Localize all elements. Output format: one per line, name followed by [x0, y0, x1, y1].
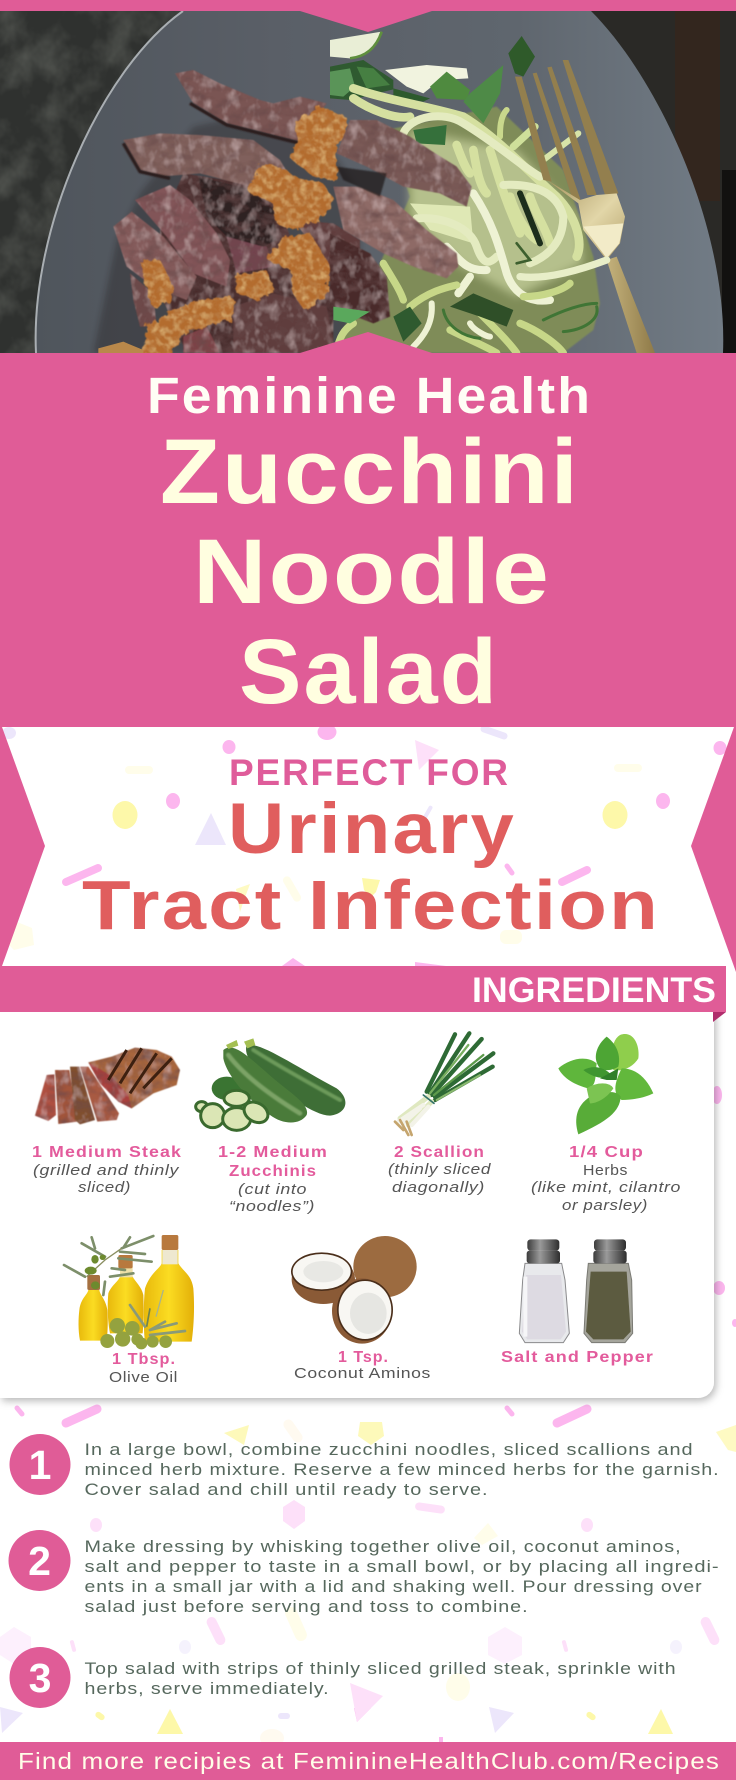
title: Noodle: Noodle — [193, 521, 551, 623]
label: 1 medium steak: 1 Medium Steak — [32, 1144, 182, 1161]
step 1 badge: 1 — [29, 1442, 51, 1488]
condition: tract infection: Tract Infection — [82, 866, 660, 944]
ingredient: salt and pepper shakers — [519, 1239, 633, 1343]
ingredient: steak — [35, 1048, 180, 1124]
footer bar — [0, 1742, 736, 1780]
mint and cut zucchini — [330, 32, 535, 123]
label: 2 scallion: (thinly sliced — [388, 1162, 492, 1178]
step 2 badge — [8, 1530, 70, 1591]
fork — [515, 60, 655, 353]
back noodles — [337, 88, 597, 353]
label: 1 tsp coconut aminos: 1 Tsp. — [338, 1349, 389, 1366]
decorative confetti background — [0, 724, 736, 1747]
top pink band with notch — [0, 0, 736, 32]
label: 1-2 medium zucchinis: “noodles”) — [229, 1199, 315, 1215]
step 2 text: Make dressing by whisking together olive oil, coconut aminos, — [84, 1537, 682, 1556]
label: 2 scallion — [388, 1144, 492, 1196]
step 3 — [10, 1647, 676, 1708]
label: 1 medium steak: sliced) — [78, 1180, 131, 1196]
label: 1/4 cup herbs: or parsley) — [562, 1198, 648, 1214]
ingredient: zucchini — [196, 1038, 345, 1130]
step 1 text: minced herb mixture. Reserve a few minced herbs for the garnish. — [84, 1460, 720, 1479]
ingredients heading band: INGREDIENTS — [472, 971, 716, 1010]
label: 1-2 medium zucchinis: 1-2 Medium — [218, 1144, 328, 1161]
step 1 badge — [10, 1434, 70, 1495]
label: 1-2 medium zucchinis: (cut into — [238, 1182, 307, 1198]
title: Zucchini: Zucchini — [160, 421, 580, 523]
label: 1 tsp coconut aminos — [294, 1349, 431, 1382]
label: 1-2 medium zucchinis: Zucchinis — [229, 1163, 317, 1180]
label: 1/4 cup herbs: Herbs — [583, 1163, 628, 1179]
label: 2 scallion: diagonally) — [392, 1180, 485, 1196]
label: 1/4 cup herbs: (like mint, cilantro — [531, 1180, 681, 1196]
ingredient: mint herbs — [558, 1034, 653, 1134]
label: 1 tbsp olive oil: 1 Tbsp. — [112, 1351, 176, 1368]
step 3 text: Top salad with strips of thinly sliced grilled steak, sprinkle with — [84, 1659, 676, 1678]
label: 1 tsp coconut aminos: Coconut Aminos — [294, 1366, 431, 1382]
step 1 — [10, 1434, 720, 1499]
ribbon panel: perfect for urinary tract infection — [0, 727, 736, 972]
ingredients heading band — [0, 966, 726, 1022]
step 1 text: In a large bowl, combine zucchini noodles, sliced scallions and — [84, 1440, 694, 1459]
ingredients card — [0, 966, 726, 1398]
label: 1 tbsp olive oil — [109, 1351, 178, 1386]
step 2 badge: 2 — [28, 1538, 51, 1584]
step 3 text — [84, 1659, 676, 1698]
subtitle: perfect for: PERFECT FOR — [229, 752, 508, 793]
label: 1-2 medium zucchinis — [218, 1144, 328, 1215]
step 3 badge — [10, 1647, 70, 1708]
step 2 text: salt and pepper to taste in a small bowl, or by placing all ingredi- — [84, 1557, 720, 1576]
label: salt and pepper: Salt and Pepper — [501, 1349, 654, 1366]
step 3 badge: 3 — [29, 1655, 51, 1701]
step 2 text: ents in a small jar with a lid and shaking well. Pour dressing over — [84, 1577, 702, 1596]
steak slices — [330, 120, 472, 323]
label: 1 medium steak: (grilled and thinly — [33, 1163, 179, 1179]
label: 1/4 cup herbs: 1/4 Cup — [569, 1144, 644, 1161]
ingredient: olive oil bottles — [64, 1235, 194, 1349]
label: 1 medium steak — [32, 1144, 182, 1196]
hero photo: steak and zucchini noodles on a plate — [0, 11, 736, 353]
step 2 text — [84, 1537, 720, 1616]
title: Feminine Health: Feminine Health — [147, 367, 592, 424]
label: 1 tbsp olive oil: Olive Oil — [109, 1370, 178, 1386]
ingredient: coconuts — [291, 1236, 417, 1344]
ingredient: scallion — [395, 1033, 493, 1135]
title: Salad: Salad — [239, 621, 499, 723]
step 2 — [8, 1530, 720, 1616]
steak, noodles, fork (right) — [330, 32, 655, 353]
label: 1/4 cup herbs — [531, 1144, 681, 1214]
step 1 text — [84, 1440, 720, 1499]
title panel — [0, 332, 736, 727]
step 3 text: herbs, serve immediately. — [84, 1679, 330, 1698]
steak and sauce (left) — [93, 70, 360, 353]
step 1 text: Cover salad and chill until ready to serve. — [84, 1480, 488, 1499]
condition: urinary: Urinary — [228, 790, 516, 869]
plate — [36, 11, 723, 353]
step 2 text: salad just before serving and toss to combine. — [84, 1597, 528, 1616]
footer bar: Find more recipies at FeminineHealthClub.com/Recipes — [18, 1748, 720, 1774]
label: 2 scallion: 2 Scallion — [394, 1144, 485, 1161]
